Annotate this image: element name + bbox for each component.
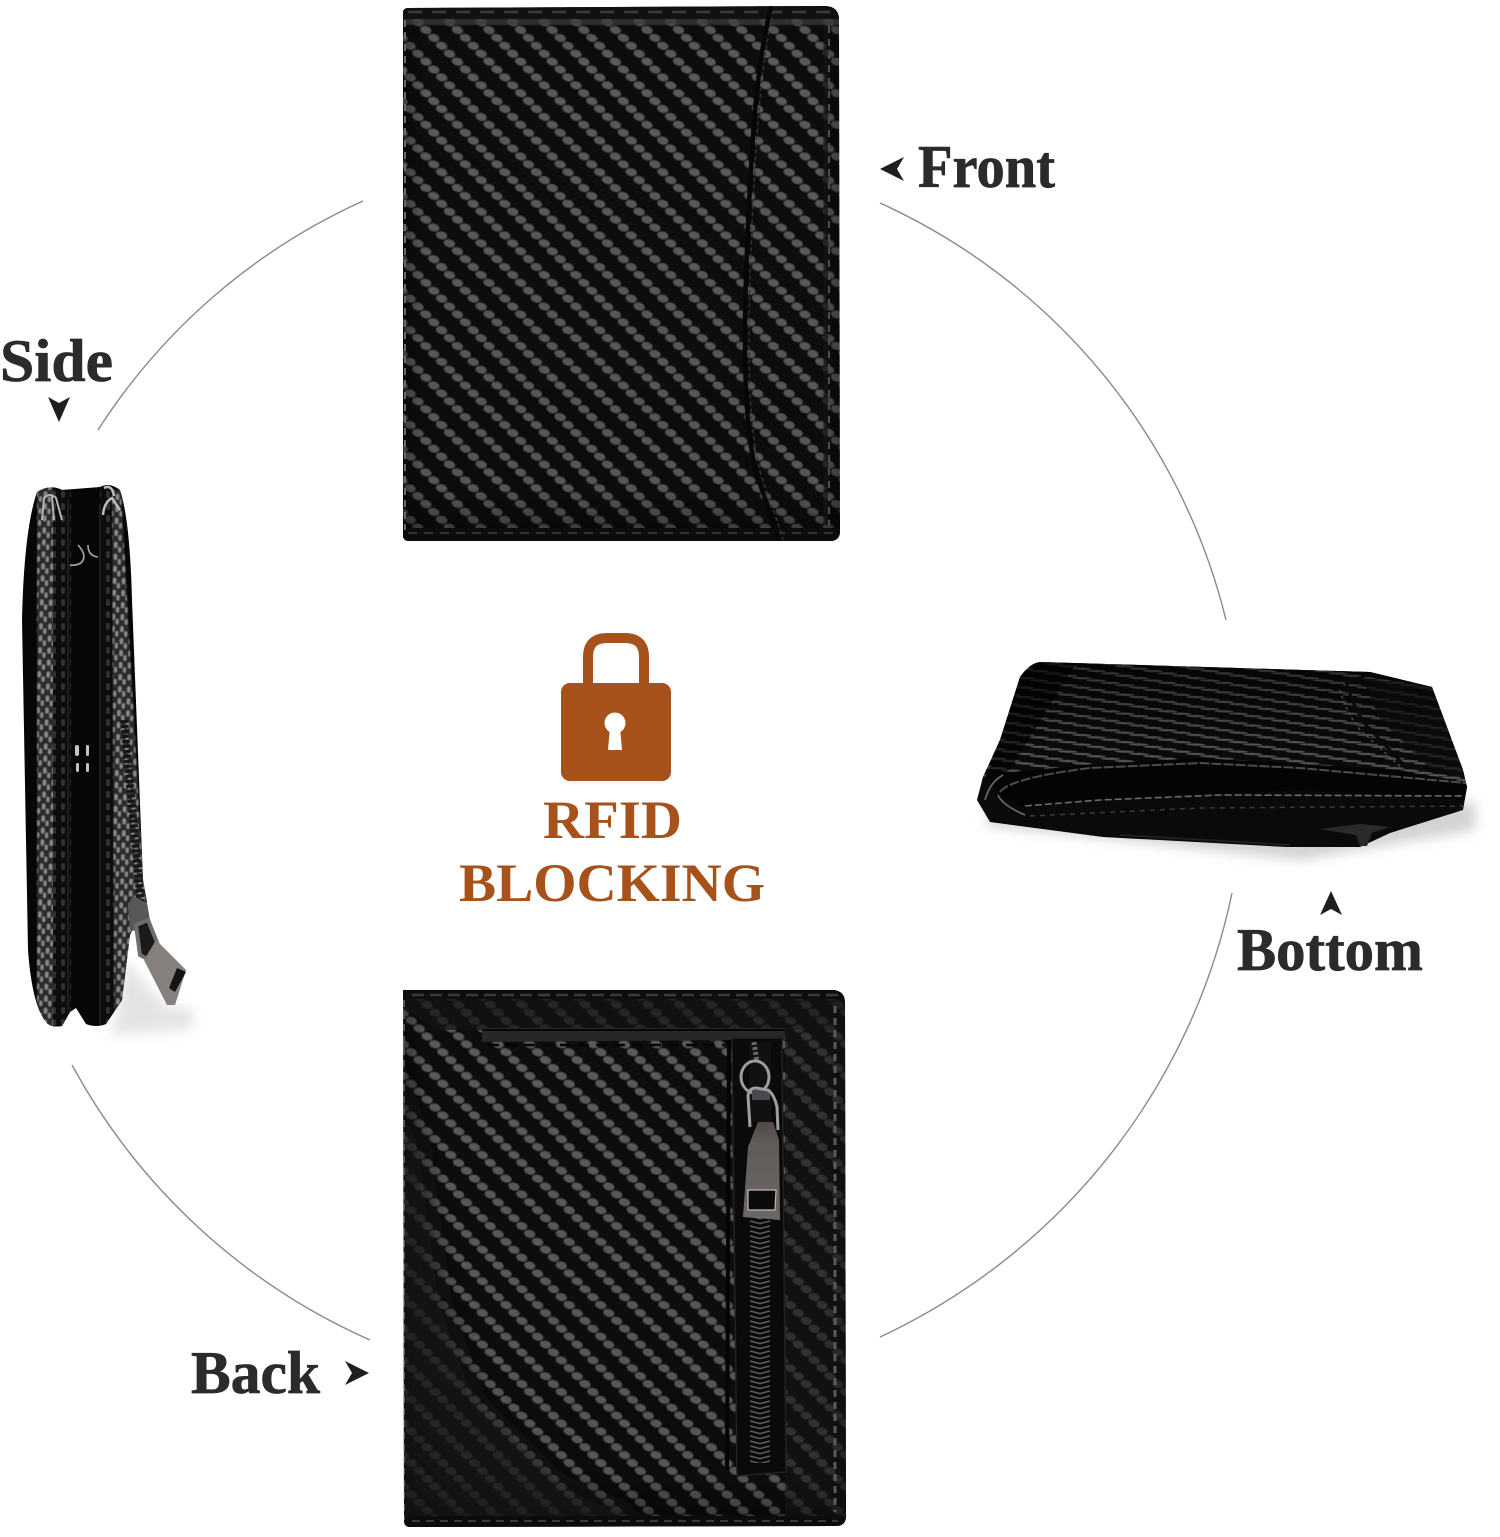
wallet: bottom view	[970, 650, 1480, 860]
back zipper pull	[741, 1061, 780, 1220]
side zipper pull	[128, 896, 186, 1005]
label: Back: Back	[191, 1340, 321, 1406]
back zipper slot	[732, 1038, 786, 1476]
side highlights	[75, 745, 89, 772]
label: Side: Side	[0, 328, 113, 394]
wallet: side view	[15, 480, 195, 1035]
bottom wallet fold opening	[985, 758, 1467, 800]
label: Side	[0, 328, 113, 422]
lock icon	[561, 638, 671, 781]
wallet: back view	[395, 985, 850, 1537]
connecting ring arcs	[72, 201, 1232, 1340]
label: Bottom: Bottom	[1237, 917, 1423, 983]
label: Front: Front	[918, 134, 1055, 200]
RFID BLOCKING label: BLOCKING	[459, 853, 765, 913]
side wallet shadow	[110, 960, 195, 1035]
RFID BLOCKING label	[459, 790, 765, 913]
RFID BLOCKING label: RFID	[543, 790, 682, 850]
wallet: front view	[400, 0, 845, 545]
back pocket top slit and stitching	[482, 1028, 786, 1042]
bottom wallet shadow	[985, 800, 1475, 860]
